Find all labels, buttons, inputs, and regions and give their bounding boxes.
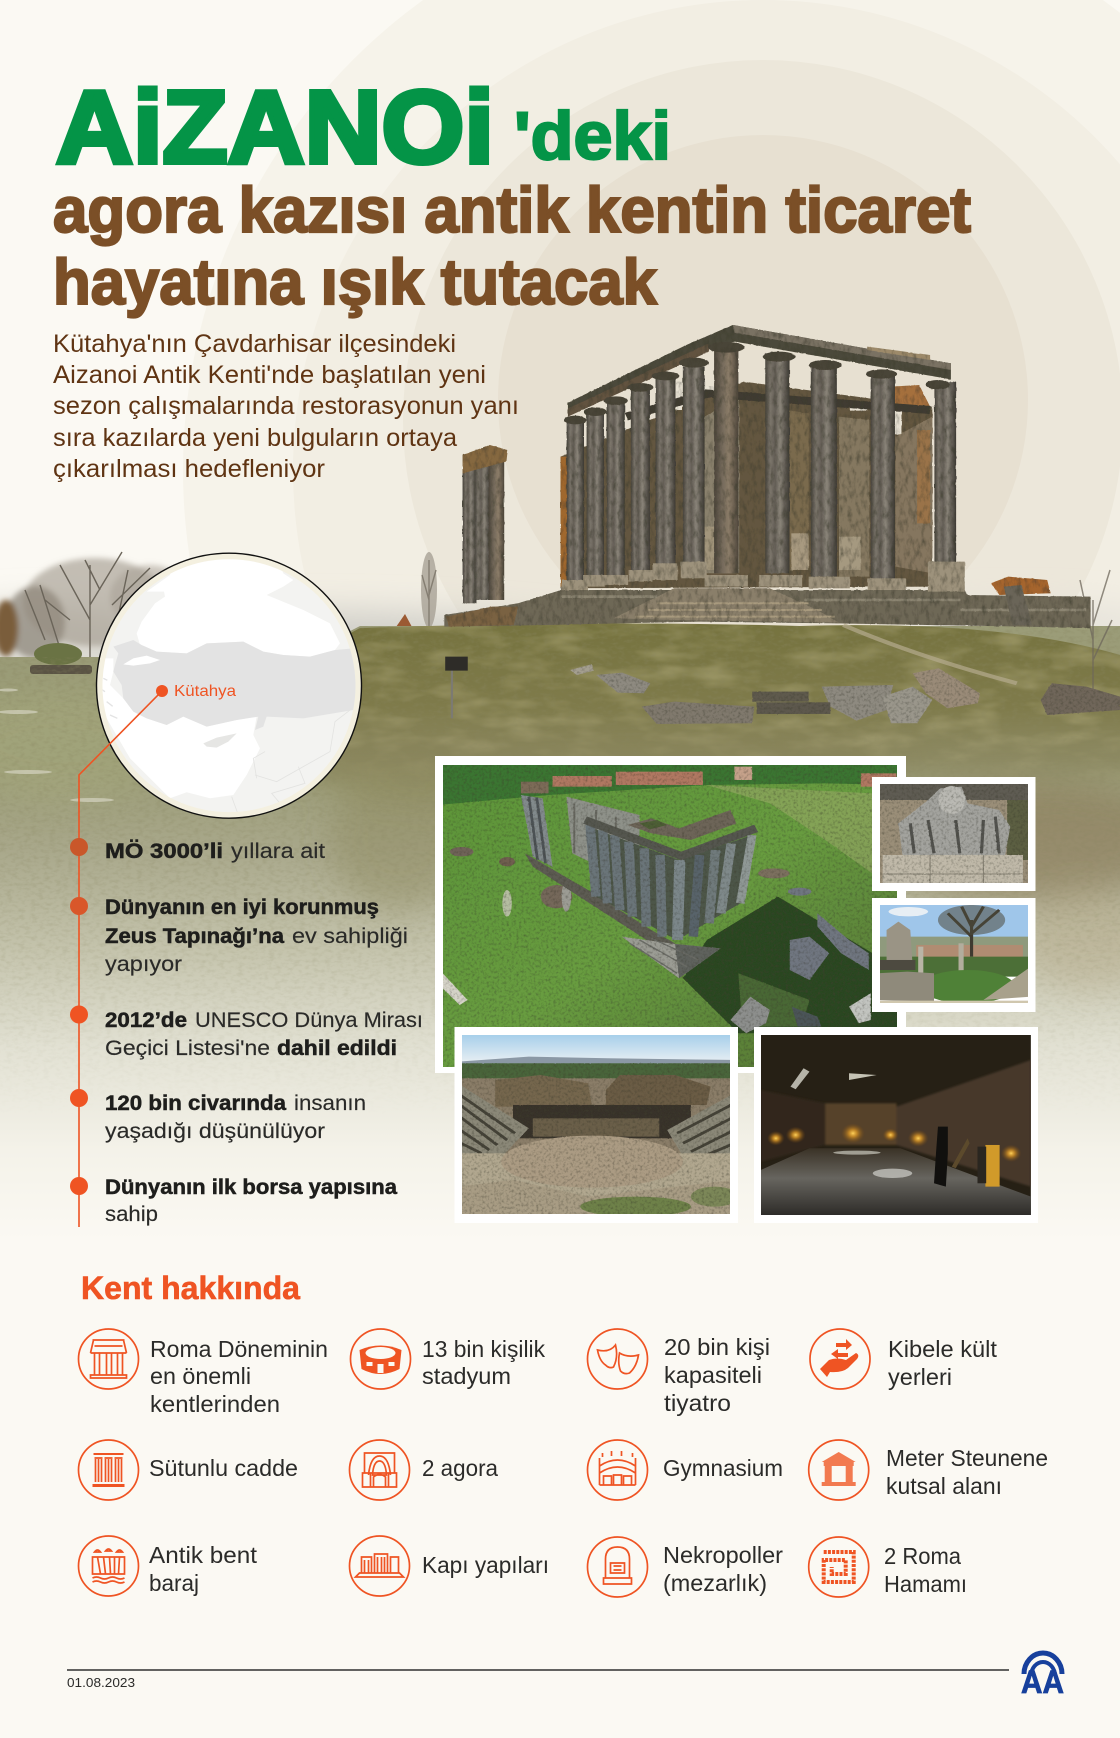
item: Nekropoller [588,1537,783,1597]
section heading: Kent hakkında [81,1270,300,1306]
icon: dam [78,1536,138,1596]
timeline item 4: insanın [294,1092,366,1115]
timeline item 2: ev sahipliği [292,925,408,948]
base [444,590,1091,628]
trees left [0,552,190,660]
item: Sütunlu cadde: Sütunlu cadde [149,1455,298,1481]
item: Antik bent: Antik bent [149,1542,258,1568]
timeline item 3: UNESCO Dünya Mirası [195,1009,423,1032]
landscape photo background [0,552,1120,1168]
roof entablature [568,325,951,414]
intro text: Kütahya'nın Çavdarhisar ilçesindeki [53,330,456,358]
icon: theatre masks [588,1329,648,1389]
icon: roman building [78,1329,138,1389]
hill [300,623,1120,790]
timeline item 2: Zeus Tapınağı’na [105,925,284,948]
item: 2 agora [350,1440,498,1500]
item: Antik bent: baraj [149,1570,199,1596]
item: Meter Steunene [809,1440,1048,1500]
timeline item 1: MÖ 3000’li [105,840,223,863]
icon: gymnasium [588,1440,648,1500]
timeline item 3: dahil edildi [277,1037,397,1060]
sea areas [137,555,340,657]
icon: agora gate [350,1440,410,1500]
timeline item 2 [70,896,408,976]
photo: aerial temple [435,756,906,1073]
stairs [622,937,721,978]
AA logo: AA [1021,1664,1064,1700]
date: 01.08.2023 [67,1676,135,1690]
rocks [450,847,871,1033]
item: tiyatro [588,1329,770,1416]
item: tiyatro: 20 bin kişi [664,1334,770,1360]
timeline item 2: yapıyor [105,953,182,976]
item: Roma Hamamı [809,1537,967,1597]
green mound and ledge [34,643,82,665]
item: Roma Dönemi [78,1329,328,1417]
icon: meander pattern [809,1537,869,1597]
intro text: sezon çalışmalarında restorasyonun yanı [53,392,519,420]
left group of columns [463,467,476,603]
timeline item 4: yaşadığı düşünülüyor [105,1120,325,1143]
item: Roma Dönemi: Roma Döneminin [150,1336,328,1362]
item: stadyum [350,1329,545,1389]
poplar tree [421,552,437,628]
item: Roma Dönemi: kentlerinden [150,1391,280,1417]
back wall [566,796,640,861]
main temple photo cutout [444,325,1120,724]
item: tiyatro: kapasiteli [664,1362,762,1388]
timeline connector line [79,691,162,1227]
timeline item 3 [70,1006,423,1060]
intro text: Aizanoi Antik Kenti'nde başlatılan yeni [53,361,486,389]
item: Antik bent [78,1536,258,1596]
timeline item 1 [70,838,325,863]
item: Kapı yapıları [350,1536,549,1596]
photo: sculpture relief [872,777,1036,891]
item: tiyatro: tiyatro [664,1390,731,1416]
title: hayatına ışık tutacak [53,246,657,318]
item: Roma Hamamı: 2 Roma [884,1543,961,1569]
columns [567,420,584,587]
item: Nekropoller: (mezarlık) [663,1570,767,1596]
icon: tombstone [588,1537,648,1597]
field [0,626,1120,1240]
item: Roma Hamamı: Hamamı [884,1571,967,1597]
item: Gymnasium: Gymnasium [663,1455,783,1481]
map circle [96,553,363,818]
item: Kibele: yerleri [888,1364,952,1390]
item: Gymnasium [588,1440,783,1500]
timeline item 4: 120 bin civarında [105,1092,286,1115]
hazy sky [0,605,1120,679]
item: Roma Dönemi: en önemli [150,1363,251,1389]
Turkey [113,640,363,730]
timeline item 5 [70,1176,397,1226]
title: agora kazısı antik kentin ticaret [53,174,971,246]
icon: temple [809,1440,869,1500]
title [53,70,971,318]
timeline item 5: sahip [105,1203,158,1226]
item: 2 agora: 2 agora [422,1455,498,1481]
timeline item 3: Geçici Listesi'ne [105,1037,270,1060]
sky gaps [676,382,682,410]
timeline item 5: Dünyanın ilk borsa yapısına [105,1176,397,1199]
photo: underground vault [754,1027,1038,1223]
photo: ancient theatre [454,1027,738,1223]
item: stadyum: stadyum [422,1363,511,1389]
item: Nekropoller: Nekropoller [663,1542,783,1568]
white stone patches [0,688,114,802]
item: Kibele: Kibele kült [888,1336,998,1362]
photo: ruins and tree [872,898,1036,1012]
intro text: çıkarılması hedefleniyor [53,455,325,483]
column bases [561,562,965,592]
rocks [570,664,1120,724]
lamp [451,670,453,718]
Cyprus [203,733,237,748]
right bare tree [1080,570,1112,700]
cella wall [561,382,932,588]
timeline item 3: 2012’de [105,1009,187,1032]
item: Sütunlu cadde [78,1440,298,1500]
shadow of temple [683,897,900,1033]
footer rule [67,1669,1009,1671]
icon: hand with arrows [810,1329,870,1389]
columns [590,825,752,940]
capitals [564,342,950,424]
item: Kibele [810,1329,998,1390]
intro text: sıra kazılarda yeni bulguların ortaya [53,424,457,452]
intro text [53,330,519,483]
background concentric circles [183,0,1120,1050]
item: Meter Steunene: Meter Steunene [886,1445,1048,1471]
item: Meter Steunene: kutsal alanı [886,1473,1002,1499]
timeline item 1: yıllara ait [231,840,325,863]
left column group [525,853,675,953]
interior [595,829,748,938]
item: Kapı yapıları: Kapı yapıları [422,1552,549,1578]
title: 'deki [514,98,671,174]
item: stadyum: 13 bin kişilik [422,1336,545,1362]
map location marker: Kütahya [174,683,236,700]
icon: stadium [350,1329,410,1389]
title: AiZANOi [56,70,494,184]
timeline item 2: Dünyanın en iyi korunmuş [105,896,379,919]
icon: gates [350,1536,410,1596]
timeline item 4 [70,1089,366,1143]
field tints [0,690,1120,990]
icon: columns [78,1440,138,1500]
